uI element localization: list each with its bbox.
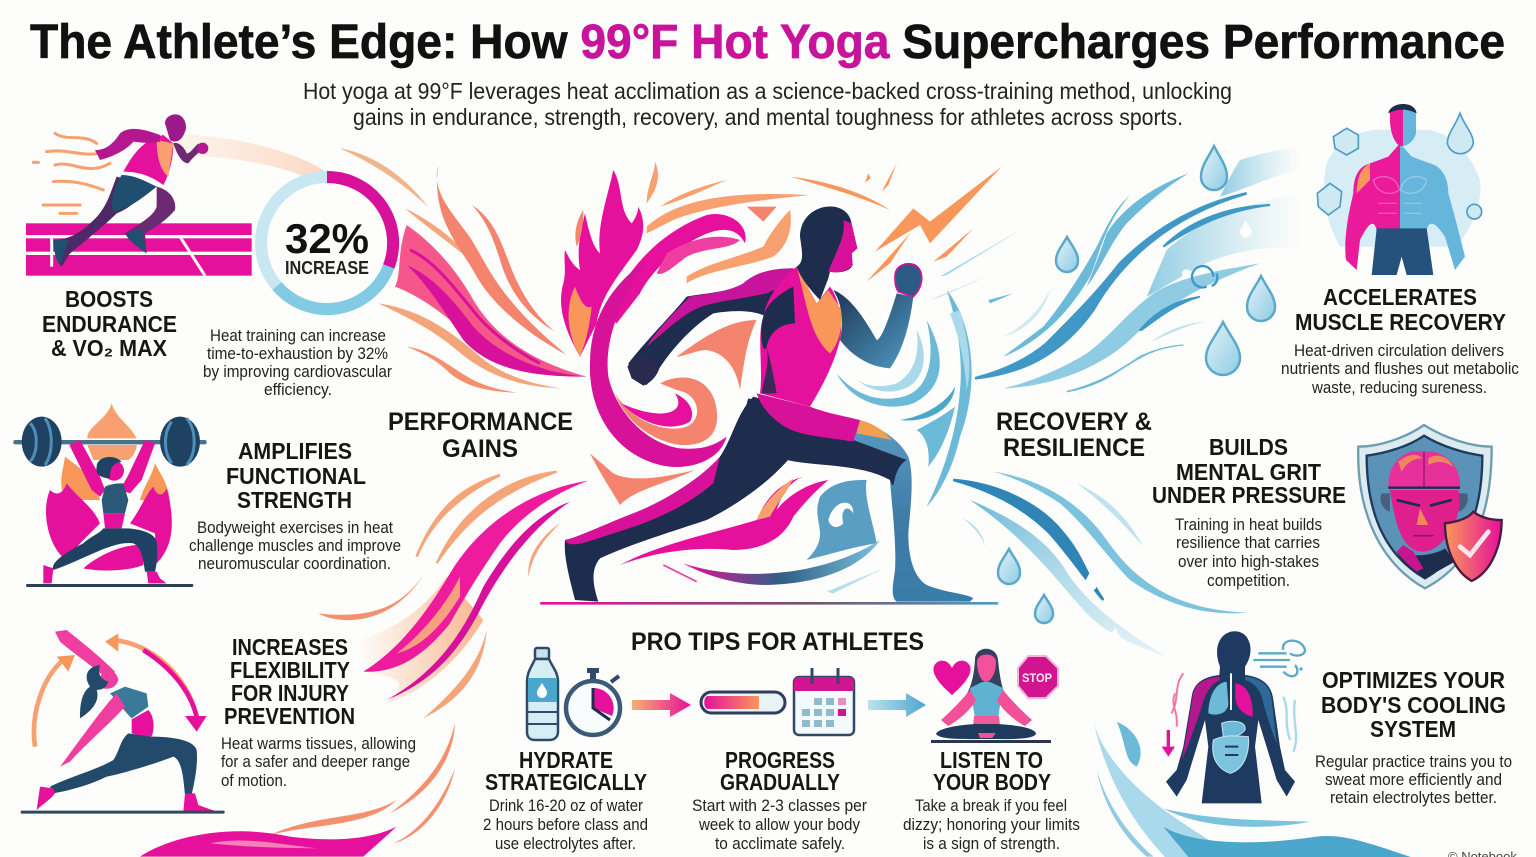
tip: progress gradually	[692, 747, 867, 853]
heading: amplifies functional strength	[226, 438, 366, 513]
subtitle: Hot yoga at 99°F leverages heat acclimation as a science-backed cross-training method, unlocking	[303, 78, 1232, 104]
water droplets	[998, 146, 1275, 623]
icon: yoga flexibility pose with arrows	[21, 630, 225, 814]
tip: listen to your body: LISTEN TO	[940, 747, 1043, 773]
cool water swirl	[683, 230, 1020, 593]
section label: performance gains: GAINS	[442, 435, 518, 463]
tip: listen to your body: Take a break if you feel	[915, 796, 1067, 815]
chart: 32% ring	[261, 177, 393, 309]
text: bodyweight exercises: Bodyweight exercises in heat	[197, 518, 393, 537]
heading: optimizes cooling	[1321, 667, 1506, 742]
text: training in heat: resilience that carries	[1176, 533, 1320, 552]
icon: body cooling organs	[1162, 631, 1305, 803]
title: The Athlete’s Edge: How 99°F Hot Yoga Supercharges Performance	[30, 16, 1505, 69]
section label: recovery and resilience: RESILIENCE	[1003, 434, 1145, 462]
central runner illustration	[540, 162, 1020, 605]
icon: stop sign: STOP	[1022, 671, 1052, 685]
text: bodyweight exercises	[189, 518, 401, 573]
icon: hot and cold muscular torso	[1317, 104, 1482, 275]
heading: accelerates muscle recovery: MUSCLE RECOVERY	[1295, 309, 1506, 335]
panel: pro tips	[483, 628, 1080, 853]
text: heat warms tissues: Heat warms tissues, allowing	[221, 734, 416, 753]
icon: heart	[933, 661, 971, 695]
lightning and sparks	[790, 163, 1002, 282]
icon: stopwatch	[566, 668, 620, 735]
text: regular practice	[1315, 752, 1512, 807]
heading: accelerates muscle recovery: ACCELERATES	[1323, 284, 1477, 310]
tip: listen to your body	[903, 747, 1080, 853]
heading: amplifies functional strength: AMPLIFIES	[238, 438, 352, 464]
tip: progress gradually: GRADUALLY	[720, 769, 840, 795]
chart: 32% ring: INCREASE	[285, 258, 369, 278]
icon: water bottle	[527, 648, 558, 740]
heading: accelerates muscle recovery	[1295, 284, 1506, 335]
heading: pro tips: PRO TIPS FOR ATHLETES	[631, 628, 924, 656]
arrow: hydrate to progress	[632, 693, 691, 717]
section label: performance gains	[388, 408, 573, 463]
lower right water streams	[953, 472, 1417, 857]
heading: builds mental grit: UNDER PRESSURE	[1152, 482, 1346, 508]
text: regular practice: Regular practice trains you to	[1315, 752, 1512, 771]
icon: brain shield	[1358, 425, 1502, 588]
arrow: progress to listen	[868, 693, 926, 717]
section label: performance gains: PERFORMANCE	[388, 408, 573, 436]
left heat streams	[127, 133, 587, 393]
tip: progress gradually: Start with 2-3 classes per	[692, 796, 867, 815]
tip: progress gradually: to acclimate safely.	[715, 834, 845, 853]
text: bodyweight exercises: neuromuscular coordination.	[198, 554, 391, 573]
heading: boosts endurance: BOOSTS	[65, 286, 153, 312]
tip: hydrate: STRATEGICALLY	[485, 769, 647, 795]
text: regular practice: retain electrolytes better.	[1330, 788, 1497, 807]
section label: recovery and resilience	[996, 408, 1152, 462]
right water streams	[975, 147, 1300, 392]
text: training in heat: over into high-stakes	[1178, 552, 1319, 571]
ground line	[540, 602, 998, 605]
text: heat warms tissues	[221, 734, 416, 790]
text: heat warms tissues: for a safer and deeper range	[221, 752, 410, 771]
lower left heat streams	[140, 472, 588, 857]
tip: progress gradually: week to allow your body	[698, 815, 860, 834]
tip: hydrate: Drink 16-20 oz of water	[489, 796, 643, 815]
text: training in heat: competition.	[1207, 571, 1290, 590]
tip: hydrate: use electrolytes after.	[495, 834, 636, 853]
heading: amplifies functional strength: STRENGTH	[237, 487, 352, 513]
text: heat-driven circulation: nutrients and flushes out metabolic	[1281, 359, 1519, 378]
icon: meditating woman	[931, 649, 1051, 743]
text: heat training: by improving cardiovascular	[203, 362, 392, 381]
chart: 32% ring: 32%	[285, 215, 369, 262]
icon: stop sign	[1018, 656, 1058, 698]
flames and heat swirl	[561, 162, 828, 582]
icon: weightlifter with flames	[13, 403, 207, 587]
icon: sprinter on track	[26, 114, 252, 276]
heading: builds mental grit: BUILDS	[1209, 434, 1288, 460]
heading: amplifies functional strength: FUNCTIONAL	[226, 463, 366, 489]
text: heat-driven circulation: Heat-driven circulation delivers	[1294, 341, 1504, 360]
heading: optimizes cooling: OPTIMIZES YOUR	[1322, 667, 1505, 693]
tip: hydrate	[483, 747, 648, 853]
text: heat training: Heat training can increase	[210, 326, 386, 345]
heading: builds mental grit	[1152, 434, 1346, 508]
text: heat training: time-to-exhaustion by 32%	[207, 344, 388, 363]
tip: listen to your body: is a sign of strength.	[923, 834, 1060, 853]
text: heat training	[203, 326, 392, 399]
text: bodyweight exercises: challenge muscles and improve	[189, 536, 401, 555]
heading: increases flexibility: FLEXIBILITY	[230, 657, 350, 683]
text: heat-driven circulation	[1281, 341, 1519, 397]
icon: progress bar	[701, 692, 785, 713]
tip: progress gradually: PROGRESS	[725, 747, 835, 773]
icon: calendar	[794, 668, 854, 735]
section label: recovery and resilience: RECOVERY &	[996, 408, 1152, 436]
tip: hydrate: 2 hours before class and	[483, 815, 648, 834]
heading: increases flexibility: FOR INJURY	[231, 680, 349, 706]
heading: increases flexibility: INCREASES	[232, 634, 348, 660]
text: training in heat: Training in heat builds	[1175, 515, 1322, 534]
heading: boosts endurance	[42, 286, 177, 361]
heading: increases flexibility	[224, 634, 355, 729]
subtitle: gains in endurance, strength, recovery, and mental toughness for athletes across sports.	[353, 104, 1183, 130]
heading: builds mental grit: MENTAL GRIT	[1176, 459, 1321, 485]
subtitle	[303, 78, 1232, 130]
heading: boosts endurance: & VO₂ MAX	[51, 335, 168, 361]
heading: increases flexibility: PREVENTION	[224, 703, 355, 729]
text: regular practice: sweat more efficiently and	[1325, 770, 1502, 789]
text: training in heat	[1175, 515, 1322, 590]
runner figure	[565, 207, 973, 602]
text: heat-driven circulation: waste, reducing sureness.	[1311, 378, 1487, 397]
heading: boosts endurance: ENDURANCE	[42, 311, 177, 337]
tip: hydrate: HYDRATE	[519, 747, 613, 773]
tip: listen to your body: YOUR BODY	[933, 769, 1051, 795]
heading: optimizes cooling: BODY'S COOLING	[1321, 692, 1506, 718]
tip: listen to your body: dizzy; honoring your limits	[903, 815, 1080, 834]
text: heat warms tissues: of motion.	[221, 771, 287, 790]
heading: optimizes cooling: SYSTEM	[1370, 716, 1456, 742]
text: heat training: efficiency.	[264, 380, 332, 399]
